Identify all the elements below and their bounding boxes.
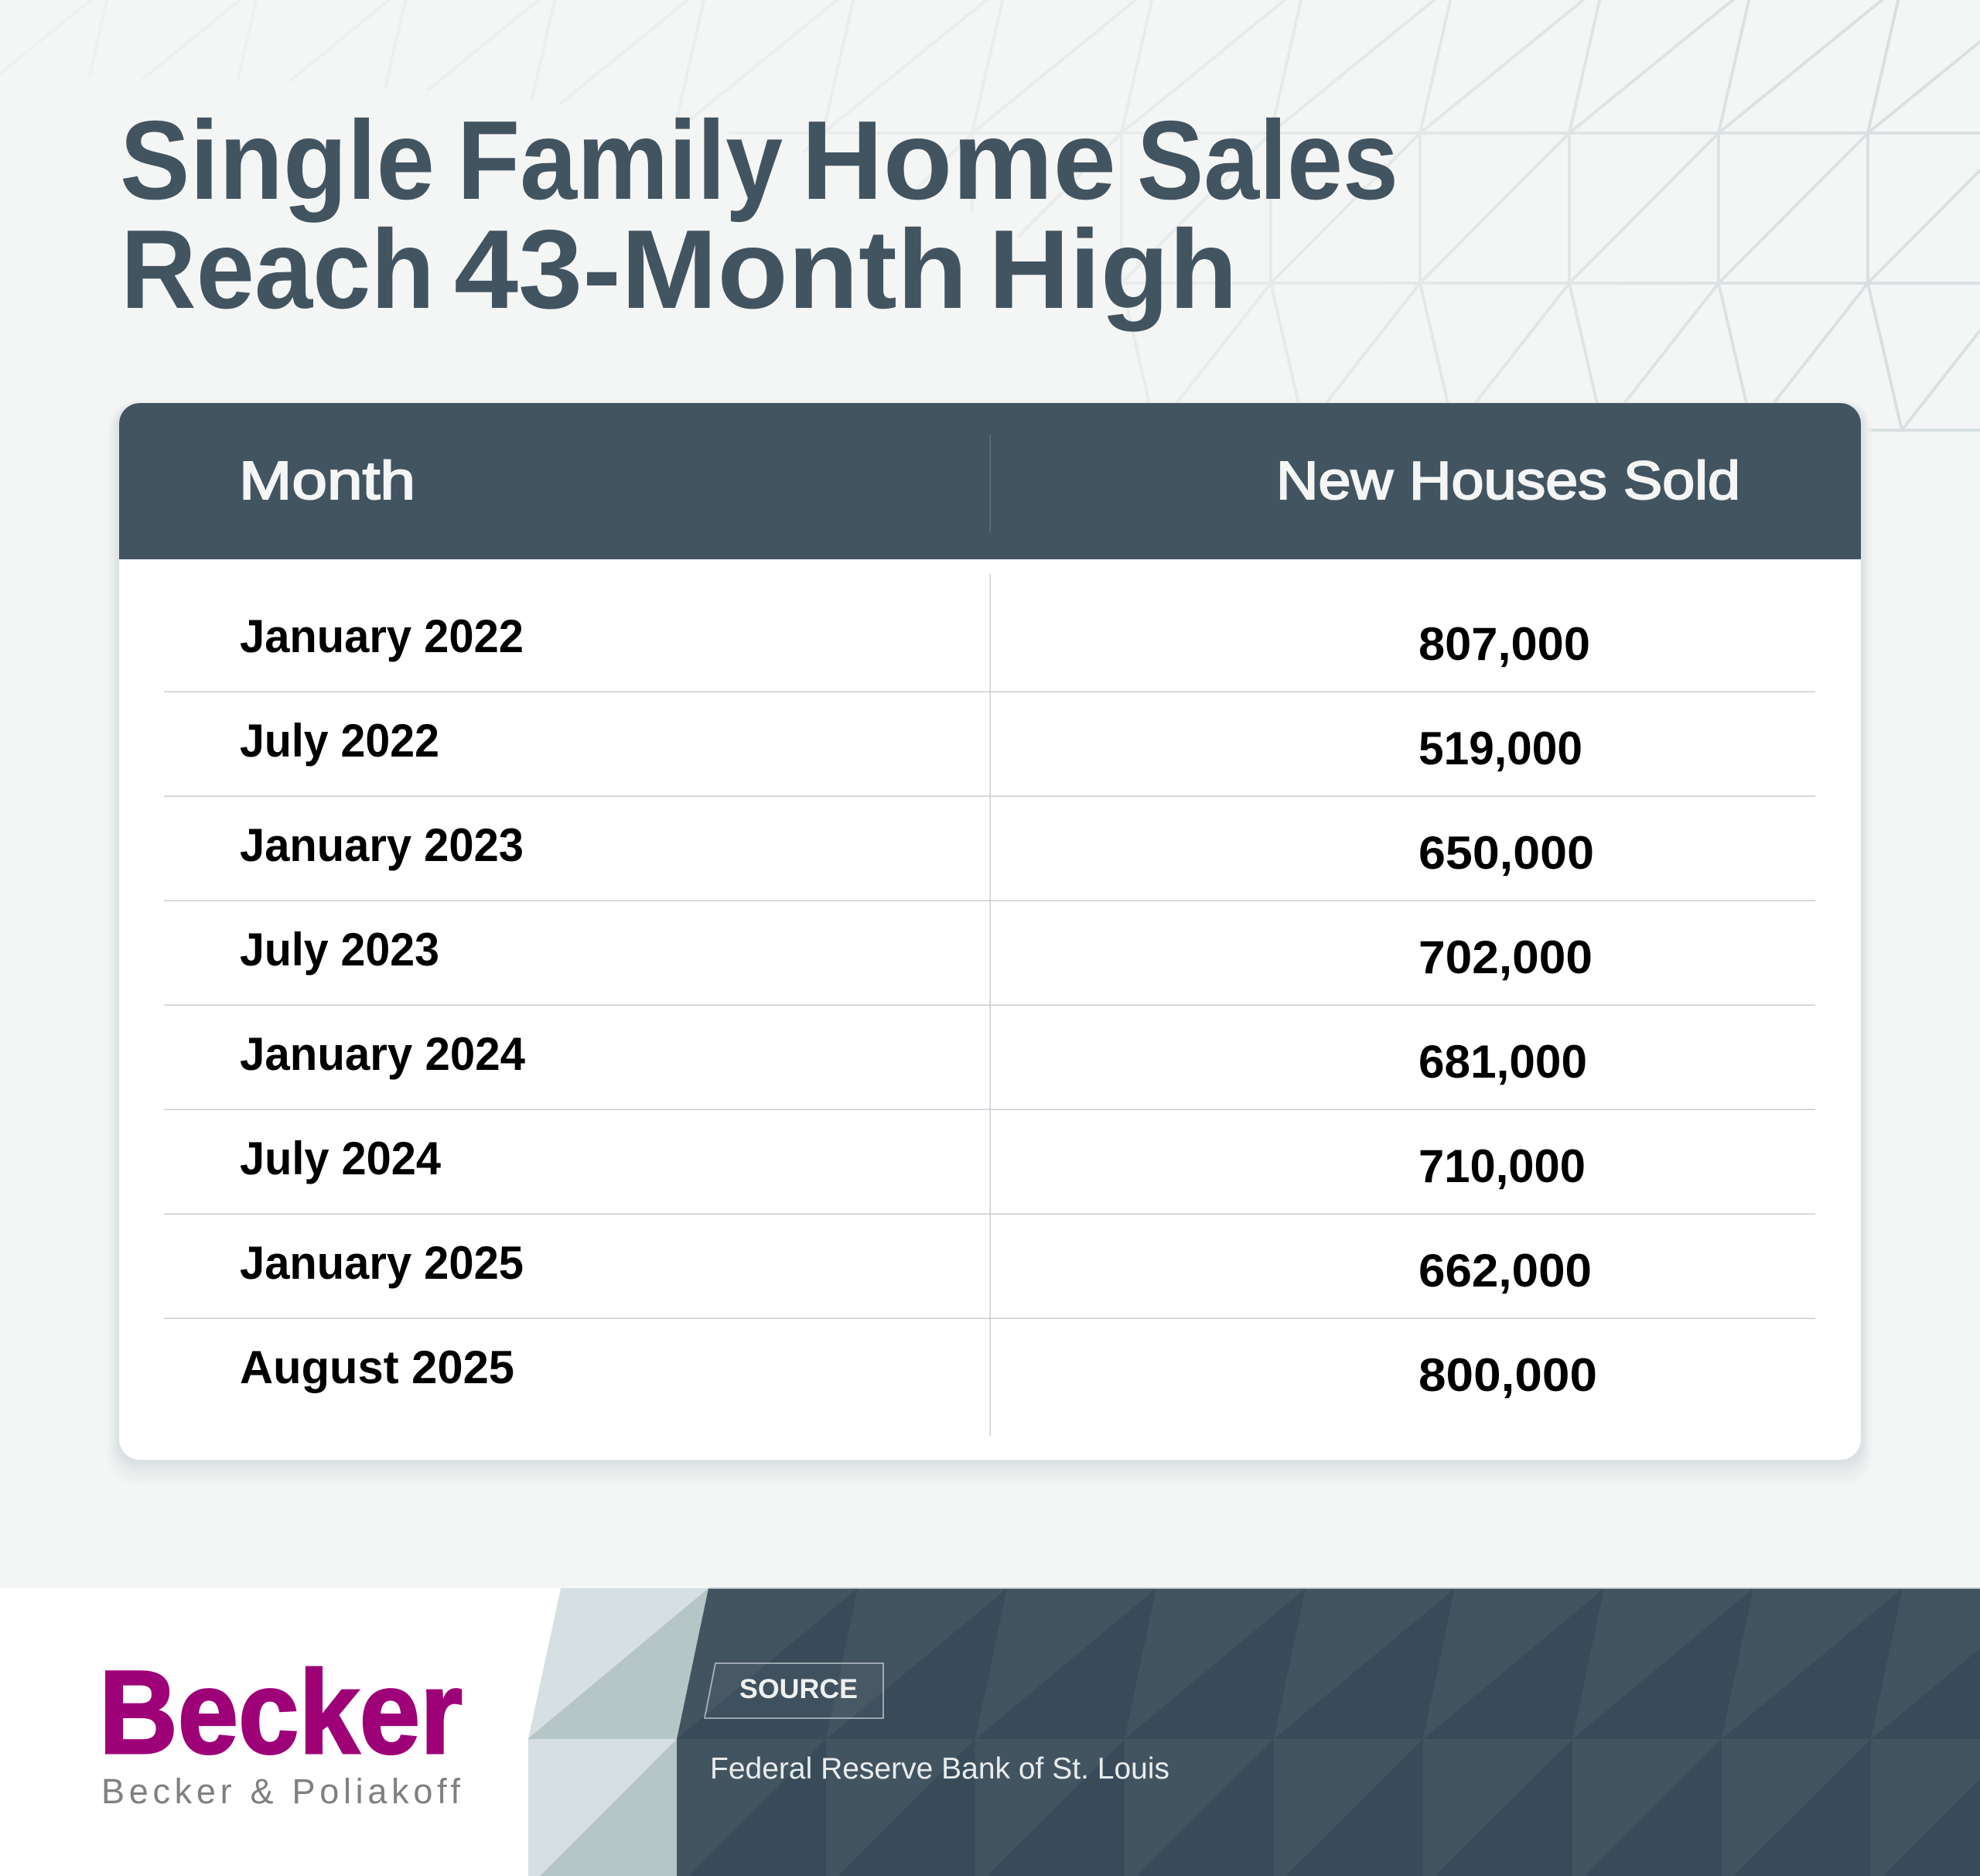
logo: Becker & Poliakoff: Becker <box>99 1646 463 1779</box>
month labels: August 2025 <box>240 1341 514 1393</box>
month labels: January 2024 <box>240 1028 526 1080</box>
footer dark geometric panel <box>677 1587 1980 1876</box>
title: 43-Month <box>454 207 968 332</box>
sales values: 519,000 <box>1418 723 1582 774</box>
source tag: SOURCE <box>739 1674 858 1704</box>
month labels <box>240 610 526 1393</box>
title: Family <box>457 97 783 223</box>
sales values: 807,000 <box>1418 618 1590 670</box>
sales values: 800,000 <box>1418 1349 1597 1401</box>
source text: Federal Reserve Bank of St. Louis <box>710 1752 1169 1785</box>
title: Reach <box>121 207 435 332</box>
background geometric line pattern <box>399 0 1980 432</box>
footer light accent strip <box>527 1588 708 1876</box>
sales values: 702,000 <box>1418 931 1593 983</box>
column heading: new houses sold: New Houses Sold <box>1276 450 1740 511</box>
sales values: 662,000 <box>1418 1245 1592 1297</box>
title: High <box>988 207 1238 332</box>
month labels: January 2023 <box>240 819 524 871</box>
table header <box>119 403 1861 559</box>
month labels: January 2022 <box>240 610 524 662</box>
card body <box>119 403 1861 1460</box>
title: Single <box>120 97 435 223</box>
sales values <box>1418 618 1597 1401</box>
title: Home <box>801 97 1116 223</box>
sales values: 650,000 <box>1418 827 1594 879</box>
card shadow <box>109 403 1871 1483</box>
sales values: 681,000 <box>1418 1036 1587 1088</box>
title: Sales <box>1137 97 1398 223</box>
month labels: July 2023 <box>240 924 439 976</box>
source tag <box>705 1663 883 1718</box>
table grid lines <box>164 574 1815 1436</box>
month labels: July 2022 <box>240 715 439 767</box>
month labels: January 2025 <box>240 1237 524 1289</box>
table panel <box>109 403 1871 1483</box>
month labels: July 2024 <box>240 1133 442 1184</box>
column heading: month: Month <box>239 450 415 511</box>
sales values: 710,000 <box>1418 1140 1586 1192</box>
footer band <box>0 1587 1980 1876</box>
title <box>120 97 1398 332</box>
logo: Becker & Poliakoff: Becker & Poliakoff <box>101 1772 460 1811</box>
footer white logo area <box>0 1588 561 1876</box>
